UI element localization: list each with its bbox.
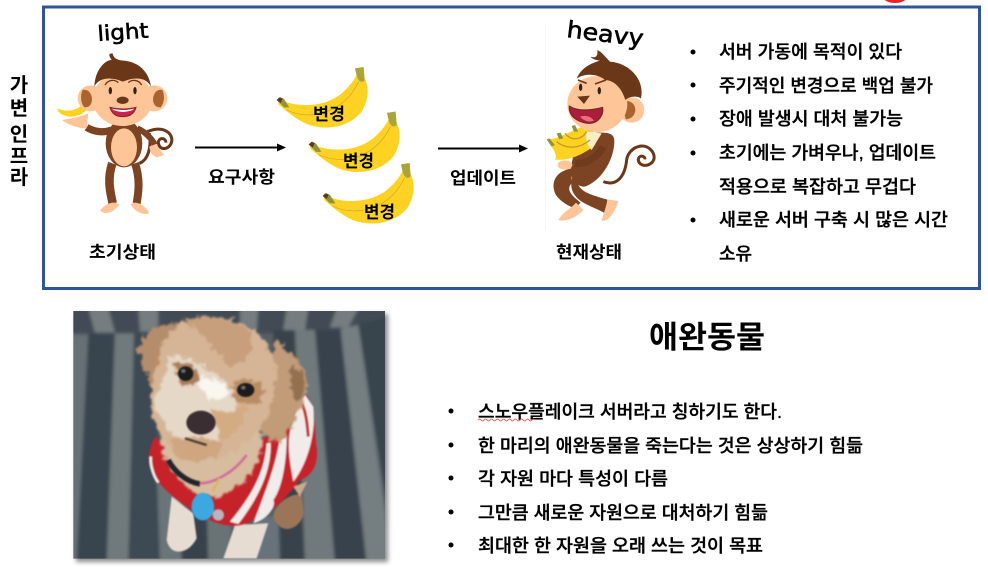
heading: 애완동물: 애완동물 <box>649 320 765 355</box>
list: pets bullets: 한 마리의 애완동물을 죽는다는 것은 상상하기 힘듦 <box>478 436 863 456</box>
vertical heading: 가변 인프라: 가 <box>10 74 28 97</box>
photo shadow <box>76 314 388 562</box>
red shape cut off at top edge <box>884 0 906 3</box>
collar <box>168 460 200 484</box>
list: mutable infrastructure bullets: 초기에는 가벼우나, 업데이트 <box>719 143 936 163</box>
sweater <box>149 395 317 526</box>
vertical heading: 가변 인프라: 인 <box>10 123 28 146</box>
icon: banana 2 with label <box>309 111 400 172</box>
list: pets bullets: 스노우플레이크 서버라고 칭하기도 한다. <box>478 402 782 422</box>
list: pets bullets: 최대한 한 자원을 오래 쓰는 것이 목표 <box>478 536 763 556</box>
tag <box>192 493 214 520</box>
arrow: 요구사항 <box>195 144 286 152</box>
arrow: 업데이트 <box>438 144 528 152</box>
dog legs <box>167 497 197 552</box>
list: mutable infrastructure bullets: 새로운 서버 구축 시 많은 시간 <box>719 210 948 230</box>
icon: heavy monkey carrying bananas <box>545 25 654 230</box>
icon: banana 2 with label: 변경 <box>343 152 374 171</box>
list: mutable infrastructure bullets: 주기적인 변경으로 백업 불가 <box>719 76 933 96</box>
icon: banana 3 with label: 변경 <box>364 203 395 222</box>
eyes <box>178 366 193 381</box>
label: 업데이트: 업데이트 <box>450 169 516 188</box>
label: 초기상태: 초기상태 <box>89 243 156 262</box>
label: light: light <box>97 18 149 46</box>
label: heavy: heavy <box>565 17 645 52</box>
icon: banana 3 with label <box>323 163 414 224</box>
nose and mouth <box>186 411 216 435</box>
list: mutable infrastructure bullets: 소유 <box>719 244 752 264</box>
list: pets bullets <box>448 402 863 556</box>
list: pets bullets: 그만큼 새로운 자원으로 대처하기 힘듦 <box>478 503 768 523</box>
list: pets bullets: 각 자원 마다 특성이 다름 <box>478 469 668 489</box>
vertical heading: 가변 인프라: 라 <box>10 166 28 189</box>
label: 요구사항: 요구사항 <box>208 168 275 187</box>
icon: light monkey holding one banana <box>57 53 172 214</box>
dog fur <box>138 316 307 497</box>
vertical heading: 가변 인프라: 변 <box>10 97 28 120</box>
vertical heading: 가변 인프라 <box>10 74 28 189</box>
list: mutable infrastructure bullets: 적용으로 복잡하고 무겁다 <box>719 177 916 197</box>
icon: banana 1 with label: 변경 <box>313 105 345 124</box>
list: mutable infrastructure bullets: 장애 발생시 대처 불가능 <box>719 109 903 129</box>
list: mutable infrastructure bullets: 서버 가동에 목적이 있다 <box>719 42 902 62</box>
photo: dog in striped sweater <box>70 308 390 563</box>
panel: mutable infrastructure frame <box>44 7 980 288</box>
list: mutable infrastructure bullets <box>690 42 948 264</box>
label: 현재상태: 현재상태 <box>556 243 622 262</box>
icon: banana 1 with label <box>277 67 368 128</box>
vertical heading: 가변 인프라: 프 <box>10 146 28 168</box>
